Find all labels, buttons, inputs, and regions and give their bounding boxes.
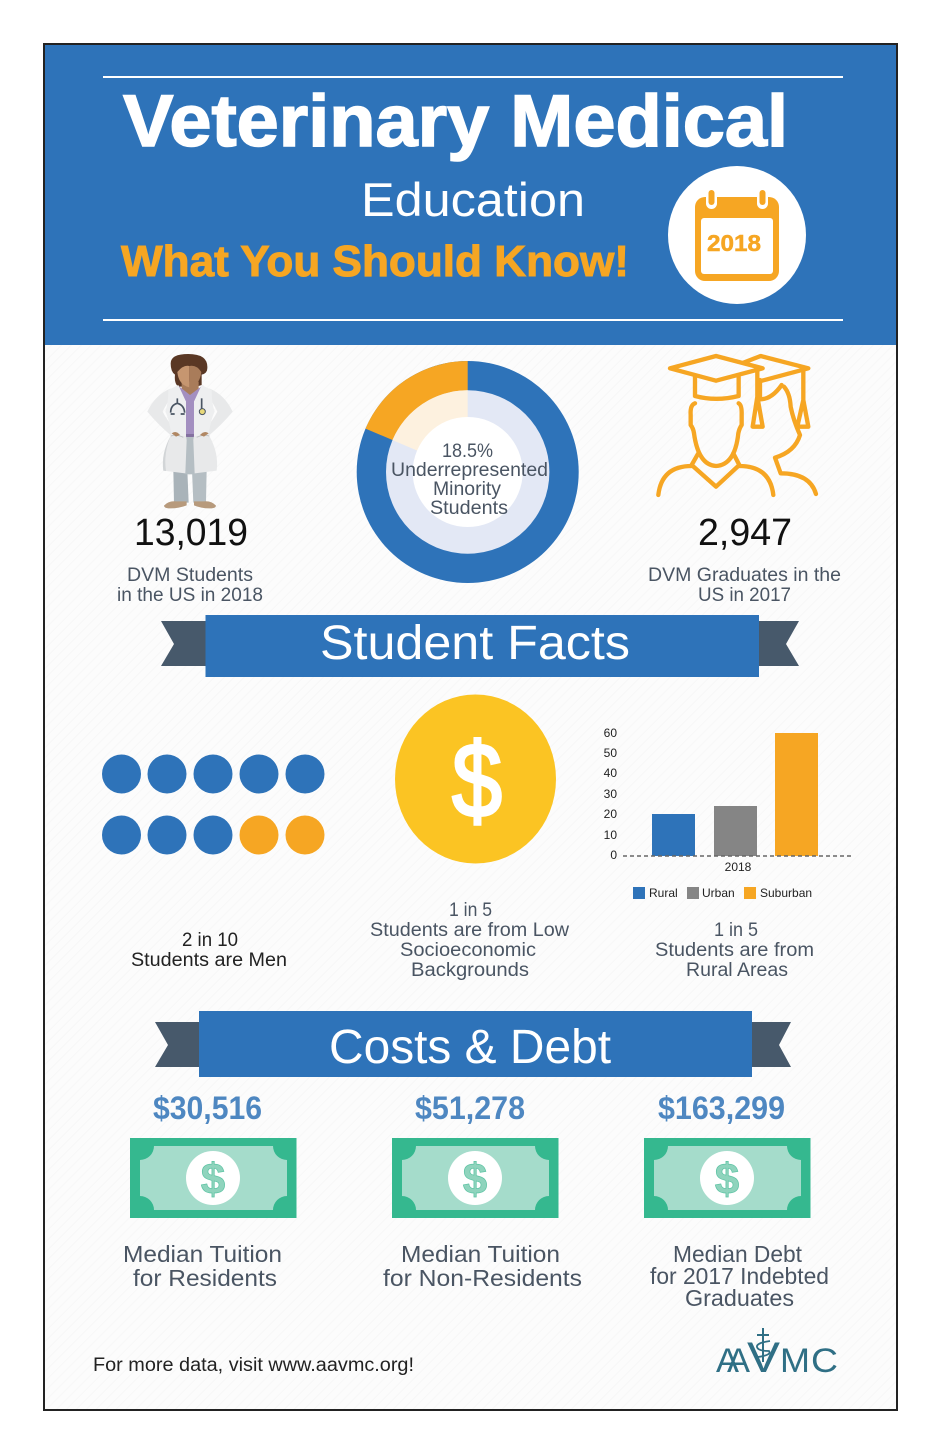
- caption: low socioeconomic: [370, 900, 569, 981]
- caption: rural areas: Students are from: [655, 940, 814, 961]
- donut label: Students: [430, 498, 508, 519]
- cost column: non-resident tuition: [383, 1090, 582, 1291]
- cost column: resident tuition: [123, 1090, 296, 1291]
- stat: DVM students: 13,019: [134, 512, 248, 554]
- y axis labels: 20: [604, 807, 617, 821]
- cost column: non-resident tuition: Median Tuition: [401, 1241, 560, 1267]
- donut label: Minority: [433, 479, 502, 500]
- icon: veterinarian figure: [147, 354, 233, 508]
- stat: DVM students: [117, 512, 263, 606]
- bar chart: rural urban suburban: 2018: [725, 860, 752, 874]
- stat: DVM students: in the US in 2018: [117, 585, 263, 606]
- cost column: median debt: Graduates: [685, 1285, 794, 1311]
- caption: students are men: [131, 930, 287, 971]
- stat: DVM students: DVM Students: [127, 565, 253, 586]
- coat right half: [193, 385, 233, 473]
- cost column: median debt: $163,299: [658, 1090, 785, 1126]
- donut label: Underrepresented: [391, 460, 548, 481]
- legend: [633, 886, 812, 900]
- subtitle: Education: [361, 173, 585, 226]
- banner: Student Facts: Student Facts: [320, 617, 630, 670]
- donut label: 18.5%: [442, 441, 493, 462]
- logo: AAVMC: V: [747, 1334, 780, 1382]
- y axis labels: 50: [604, 746, 617, 760]
- logo: AAVMC: C: [811, 1342, 838, 1380]
- donut chart: underrepresented minority students: [357, 361, 579, 583]
- caption: rural areas: 1 in 5: [714, 920, 758, 941]
- logo: AAVMC: [716, 1328, 838, 1382]
- coat left half: [147, 385, 187, 473]
- caption: low socioeconomic: Backgrounds: [411, 960, 529, 981]
- caption: low socioeconomic: Students are from Low: [370, 920, 569, 941]
- stat: DVM graduates: DVM Graduates in the: [648, 565, 841, 586]
- icon: dollar bill: $: [201, 1155, 225, 1204]
- caption: students are men: 2 in 10: [182, 930, 238, 951]
- logo: AAVMC: M: [780, 1342, 810, 1380]
- icon: dollar bill: [644, 1138, 810, 1218]
- icon: calendar 2018: [668, 166, 806, 304]
- y axis labels: 40: [604, 766, 617, 780]
- cost column: median debt: [644, 1090, 829, 1311]
- stat: DVM graduates: US in 2017: [698, 585, 791, 606]
- header panel: [45, 45, 896, 345]
- icon: dollar coin: [395, 694, 556, 864]
- y axis labels: 10: [604, 828, 617, 842]
- legend: Suburban: [760, 886, 812, 900]
- title: Veterinary Medical: [123, 81, 788, 162]
- legend: Rural: [649, 886, 678, 900]
- cost column: non-resident tuition: $51,278: [415, 1090, 525, 1126]
- caption: rural areas: [655, 920, 814, 981]
- tagline: What You Should Know!: [121, 237, 629, 286]
- caption: students are men: Students are Men: [131, 950, 287, 971]
- icon: dollar bill: [130, 1138, 296, 1218]
- banner: Costs & Debt: Costs & Debt: [329, 1021, 611, 1074]
- y axis labels: 30: [604, 787, 617, 801]
- banner: Student Facts: [161, 615, 799, 677]
- icon: dollar coin: $: [452, 722, 502, 840]
- cost column: non-resident tuition: for Non-Residents: [383, 1265, 582, 1291]
- footer note: For more data, visit www.aavmc.org!: [93, 1355, 414, 1376]
- caption: low socioeconomic: Socioeconomic: [400, 940, 536, 961]
- caption: rural areas: Rural Areas: [686, 960, 788, 981]
- caption: low socioeconomic: 1 in 5: [449, 900, 492, 921]
- legend: Urban: [702, 886, 735, 900]
- cost column: median debt: for 2017 Indebted: [650, 1263, 829, 1289]
- dot chart: 2 in 10: [102, 754, 324, 854]
- icon: dollar bill: $: [463, 1155, 487, 1204]
- logo: AAVMC: A: [716, 1342, 739, 1380]
- stat: DVM graduates: [648, 512, 841, 606]
- y axis labels: [604, 726, 617, 862]
- stat: DVM graduates: 2,947: [698, 512, 792, 554]
- logo: AAVMC: A: [727, 1342, 750, 1380]
- icon: dollar bill: [392, 1138, 558, 1218]
- donut label: [391, 441, 548, 519]
- cost column: resident tuition: Median Tuition: [123, 1241, 282, 1267]
- icon: calendar 2018: 2018: [707, 230, 761, 256]
- bar chart: rural urban suburban: [604, 726, 853, 900]
- y axis labels: 60: [604, 726, 617, 740]
- icon: dollar bill: $: [715, 1155, 739, 1204]
- y axis labels: 0: [610, 848, 617, 862]
- banner: Costs & Debt: [155, 1011, 791, 1077]
- cost column: median debt: Median Debt: [673, 1241, 803, 1267]
- icon: graduates: [658, 356, 816, 495]
- cost column: resident tuition: for Residents: [133, 1265, 277, 1291]
- cost column: resident tuition: $30,516: [153, 1090, 262, 1126]
